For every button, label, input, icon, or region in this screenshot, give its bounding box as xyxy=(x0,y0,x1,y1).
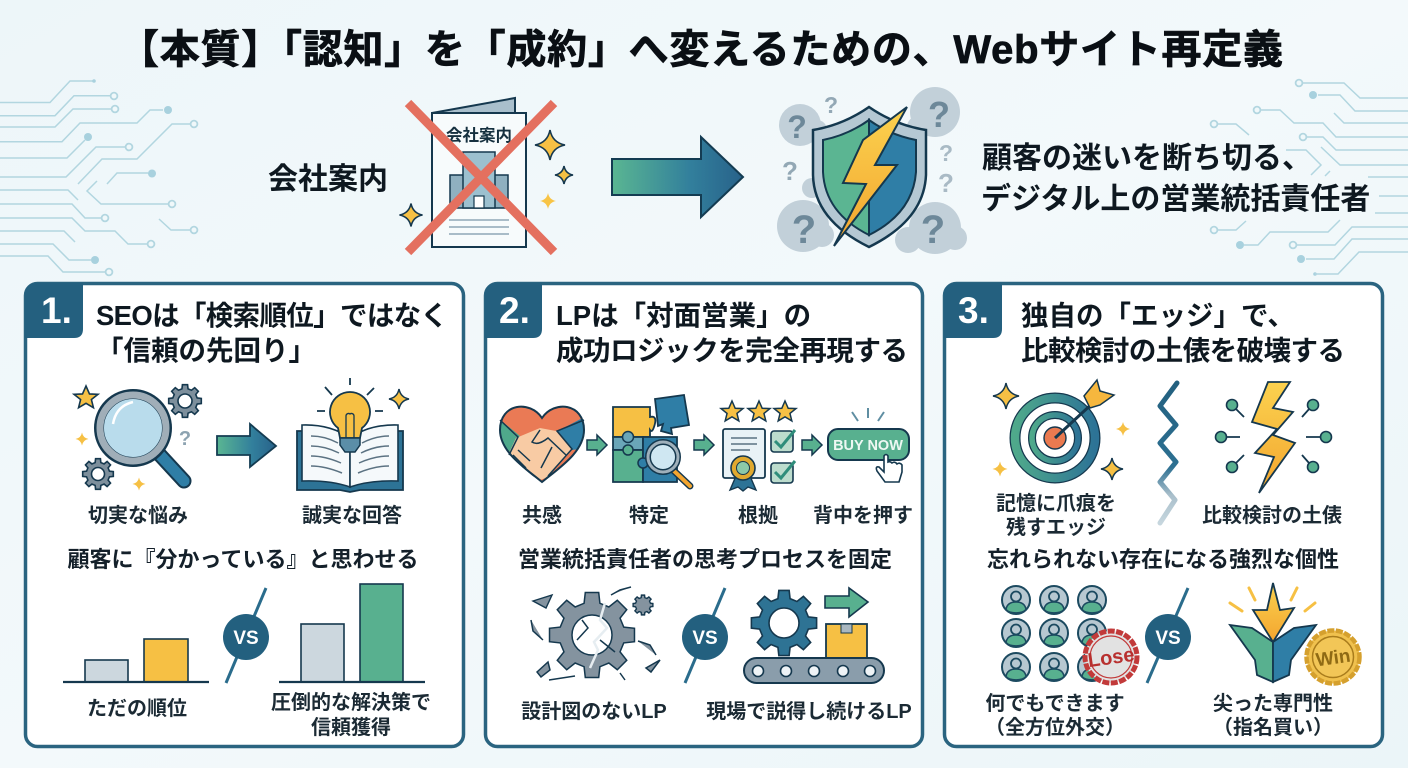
icon: crossed-out company brochure xyxy=(400,98,573,252)
icon: open book with light bulb xyxy=(297,378,409,492)
title: 【本質】「認知」を「成約」へ変えるための、Webサイト再定義 xyxy=(119,28,1283,72)
panel 1 heading: 「信頼の先回り」 xyxy=(96,335,316,366)
panel 3 heading: 比較検討の土俵を破壊する xyxy=(1021,335,1345,366)
icon: crossed-out company brochure: 会社案内 xyxy=(446,126,512,145)
label: 尖った専門性（指名買い） xyxy=(1213,692,1333,739)
icon: handshake heart xyxy=(499,406,585,484)
label: 特定: 特定 xyxy=(629,504,669,527)
left circuit pattern xyxy=(0,79,197,275)
label: 誠実な回答: 誠実な回答 xyxy=(302,503,402,527)
label: 根拠: 根拠 xyxy=(738,504,778,527)
badge 3 xyxy=(944,283,1002,338)
label: 圧倒的な解決策で信頼獲得 xyxy=(271,691,431,739)
panel 2 heading xyxy=(556,300,908,366)
icon: certificate with stars and checks xyxy=(721,401,796,491)
icon: shield with lightning among question clouds: ? xyxy=(824,92,838,118)
label: 圧倒的な解決策で信頼獲得: 信頼獲得 xyxy=(311,716,391,739)
label: 切実な悩み: 切実な悩み xyxy=(88,504,188,527)
icon: generic people grid with Lose stamp: Lose xyxy=(1086,644,1136,672)
icon: BUY NOW button xyxy=(828,408,909,482)
panel 1 heading xyxy=(96,300,448,366)
panel 3: edge xyxy=(944,283,1382,746)
label: 何でもできます（全方位外交）: （全方位外交） xyxy=(985,716,1125,739)
panel 2 heading: 成功ロジックを完全再現する xyxy=(556,335,908,366)
badge 2 xyxy=(485,283,542,338)
label: 現場で説得し続けるLP: 現場で説得し続けるLP xyxy=(706,700,912,723)
label: 何でもできます（全方位外交） xyxy=(985,692,1125,739)
panel 2: LP xyxy=(485,283,922,746)
icon: target with arrow xyxy=(992,380,1130,480)
icon: lightning with nodes xyxy=(1216,382,1332,493)
VS badge 3 xyxy=(1145,588,1191,683)
panel 1 heading: SEOは「検索順位」ではなく xyxy=(96,300,448,331)
arrow: step 3 xyxy=(802,435,822,455)
icon: shield with lightning among question clouds xyxy=(777,87,967,254)
icon: shield with lightning among question clouds: ? xyxy=(939,140,953,166)
chart: plain ranking bars xyxy=(63,639,209,682)
icon: sharp specialty with Win medal: Win xyxy=(1315,646,1352,671)
label: ただの順位: ただの順位 xyxy=(87,697,187,720)
label: 記憶に爪痕を残すエッジ xyxy=(996,492,1116,539)
icon: sharp specialty with Win medal xyxy=(1230,583,1360,684)
subheading 3: 忘れられない存在になる強烈な個性 xyxy=(987,547,1339,572)
badge 1: 1. xyxy=(41,290,72,331)
icon: shield with lightning among question clouds: ? xyxy=(938,168,954,198)
panel 3 heading xyxy=(1021,300,1345,366)
VS badge 2: VS xyxy=(692,628,718,649)
icon: shield with lightning among question clouds: ? xyxy=(928,94,950,135)
text: digital sales lead: 顧客の迷いを断ち切る、 xyxy=(982,142,1312,175)
icon: shield with lightning among question clouds: ? xyxy=(782,156,798,186)
text: digital sales lead xyxy=(981,142,1370,216)
icon: magnifying glass with gears xyxy=(74,385,201,490)
panel 2 heading: LPは「対面営業」の xyxy=(556,300,811,331)
label: 比較検討の土俵: 比較検討の土俵 xyxy=(1202,504,1342,527)
icon: shield with lightning among question clouds: ? xyxy=(787,109,807,145)
icon: BUY NOW button: BUY NOW xyxy=(833,438,903,454)
icon: generic people grid with Lose stamp xyxy=(1002,586,1137,683)
label: 何でもできます（全方位外交）: 何でもできます xyxy=(985,692,1125,715)
text: digital sales lead: デジタル上の営業統括責任者 xyxy=(981,182,1370,216)
badge 3: 3. xyxy=(958,290,989,331)
icon: broken gear xyxy=(531,587,660,680)
icon: gear and conveyor belt xyxy=(744,588,884,683)
icon: shield with lightning among question clouds: ? xyxy=(921,208,945,252)
icon: magnifying glass with gears: ? xyxy=(179,428,191,450)
zigzag divider xyxy=(1160,383,1177,523)
VS badge 1 xyxy=(223,588,269,683)
label: 記憶に爪痕を残すエッジ: 残すエッジ xyxy=(1006,515,1106,539)
panel 1: SEO xyxy=(25,283,464,746)
VS badge 1: VS xyxy=(233,628,259,649)
label: 設計図のないLP: 設計図のないLP xyxy=(521,700,667,723)
subheading 2: 営業統括責任者の思考プロセスを固定 xyxy=(518,547,892,572)
arrow: worries to answers xyxy=(217,424,276,467)
label: 記憶に爪痕を残すエッジ: 記憶に爪痕を xyxy=(996,492,1116,515)
icon: shield with lightning among question clouds: ? xyxy=(792,208,816,252)
label: 会社案内: 会社案内 xyxy=(268,163,388,196)
label: 圧倒的な解決策で信頼獲得: 圧倒的な解決策で xyxy=(271,691,431,714)
VS badge 2 xyxy=(682,588,728,683)
label: 尖った専門性（指名買い）: （指名買い） xyxy=(1213,716,1333,739)
arrow: main transformation xyxy=(612,137,743,217)
label: 尖った専門性（指名買い）: 尖った専門性 xyxy=(1213,692,1333,715)
VS badge 3: VS xyxy=(1155,628,1181,649)
subheading 1: 顧客に『分かっている』と思わせる xyxy=(68,547,418,572)
panel 3 heading: 独自の「エッジ」で、 xyxy=(1021,300,1295,331)
arrow: step 1 xyxy=(587,435,607,455)
chart: overwhelming solution bars xyxy=(279,584,425,682)
arrow: step 2 xyxy=(694,435,714,455)
icon: puzzle with magnifier xyxy=(613,395,690,486)
badge 1 xyxy=(25,283,83,338)
label: 共感: 共感 xyxy=(522,503,562,527)
badge 2: 2. xyxy=(499,290,530,331)
right circuit pattern xyxy=(1211,80,1408,276)
label: 背中を押す: 背中を押す xyxy=(813,504,913,527)
